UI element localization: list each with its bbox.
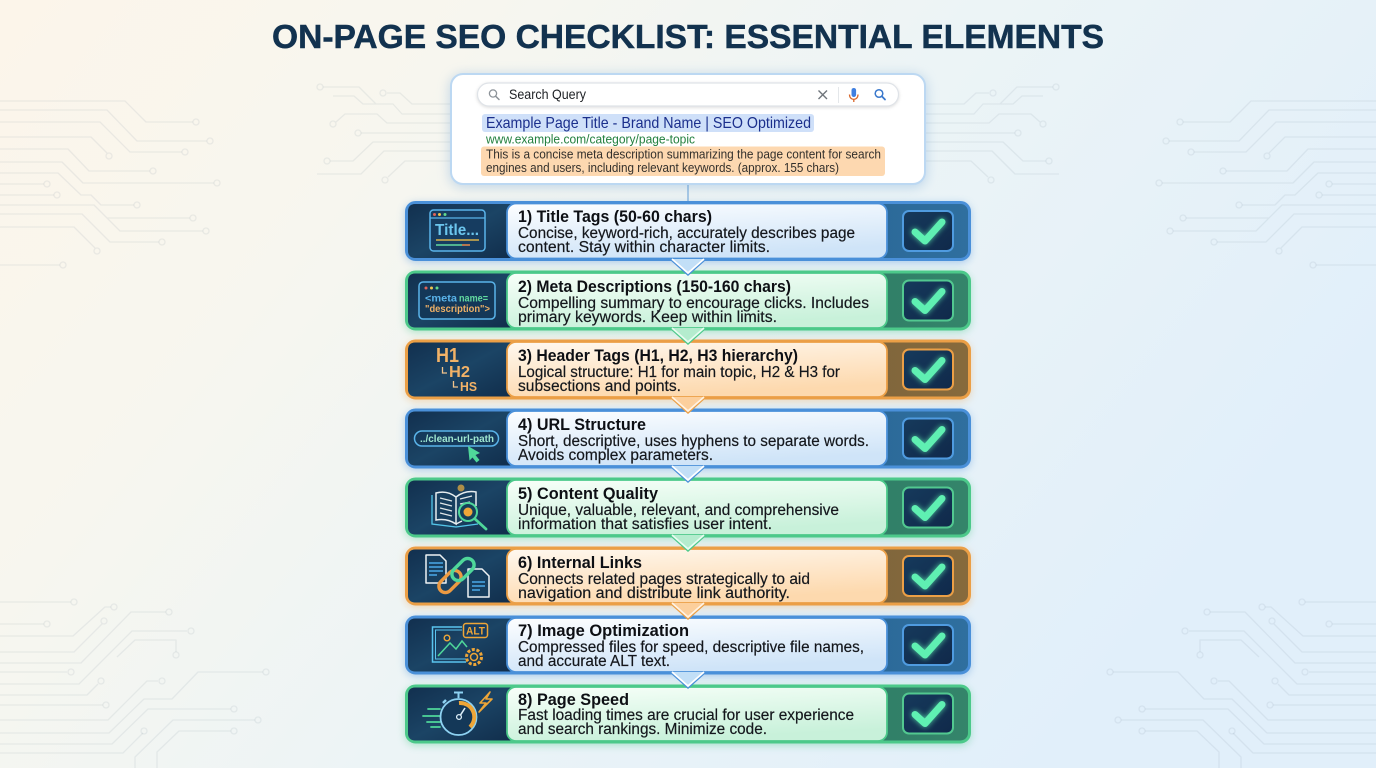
title: ON-PAGE SEO CHECKLIST: ESSENTIAL ELEMENTS: [272, 19, 1104, 56]
arrow: row 1 to row 2: [669, 259, 707, 276]
icon: checkmark: [903, 694, 953, 734]
icon: url pill with cursor: ../clean-url-path: [420, 433, 494, 445]
icon: checkmark: [903, 556, 953, 596]
text: meta descriptions: [518, 278, 869, 326]
text: internal links: navigation and distribute link authority.: [518, 585, 790, 602]
meta description highlight: This is a concise meta description summarizing the page content for search: [486, 148, 881, 162]
text: internal links: Connects related pages strategically to aid: [518, 571, 810, 588]
icon: header hierarchy: H1: [436, 345, 459, 367]
text: page speed: and search rankings. Minimize code.: [518, 721, 767, 738]
text: content quality: Unique, valuable, relevant, and comprehensive: [518, 502, 839, 519]
arrow: row 6 to row 7: [669, 603, 707, 620]
arrow: row 2 to row 3: [669, 328, 707, 345]
text: content quality: 5) Content Quality: [518, 485, 659, 503]
panel: row 7 image optimization: [406, 617, 970, 673]
text: internal links: 6) Internal Links: [518, 554, 642, 572]
search bar: Search Query: [509, 86, 586, 102]
icon: meta tag code window: name=: [459, 292, 488, 304]
icon: checkmark: [903, 488, 953, 528]
text: header tags: subsections and points.: [518, 378, 681, 395]
text: header tags: [518, 347, 840, 395]
text: meta descriptions: primary keywords. Keep within limits.: [518, 309, 777, 326]
icon: checkmark: [903, 418, 953, 458]
connector line: [687, 183, 689, 203]
icon: url pill with cursor: [414, 431, 498, 462]
icon: image, alt tag and gear: ALT: [466, 626, 485, 638]
text: url structure: Short, descriptive, uses hyphens to separate words.: [518, 433, 869, 450]
text: header tags: 3) Header Tags (H1, H2, H3 hierarchy): [518, 347, 798, 365]
text: url structure: 4) URL Structure: [518, 416, 646, 434]
text: header tags: Logical structure: H1 for main topic, H2 & H3 for: [518, 364, 840, 381]
search bar: [478, 83, 898, 106]
icon: checkmark: [903, 350, 953, 390]
panel: search result preview: [451, 74, 925, 184]
arrow: row 3 to row 4: [669, 397, 707, 414]
text: title tags: 1) Title Tags (50-60 chars): [518, 208, 712, 226]
icon: browser window title: [430, 210, 485, 251]
icon: meta tag code window: [419, 282, 495, 319]
icon: browser window title: Title...: [435, 222, 479, 239]
icon: checkmark: [903, 211, 953, 251]
text: image optimization: 7) Image Optimization: [518, 622, 689, 640]
panel: row 3 header tags: [406, 341, 970, 398]
text: page speed: 8) Page Speed: [518, 691, 629, 709]
text: page speed: Fast loading times are crucial for user experience: [518, 707, 854, 724]
panel: row 2 meta descriptions: [406, 272, 970, 329]
text: page speed: [518, 691, 854, 738]
text: content quality: [518, 485, 839, 533]
icon: meta tag code window: "description">: [425, 303, 490, 315]
text: internal links: [518, 554, 810, 602]
icon: stopwatch and lightning: [423, 692, 492, 735]
arrow: row 4 to row 5: [669, 466, 707, 483]
icon: meta tag code window: <meta: [425, 292, 457, 304]
text: title tags: [518, 208, 855, 256]
panel: row 1 title tags: [406, 202, 970, 260]
text: url structure: [518, 416, 869, 464]
meta description highlight: engines and users, including relevant keywords. (approx. 155 chars): [486, 161, 839, 175]
text: title tags: Concise, keyword-rich, accurately describes page: [518, 225, 855, 242]
icon: header hierarchy: [436, 345, 477, 394]
text: image optimization: Compressed files for speed, descriptive file names,: [518, 639, 864, 656]
text: meta descriptions: 2) Meta Descriptions (150-160 chars): [518, 278, 791, 296]
text: title tags: content. Stay within character limits.: [518, 239, 770, 256]
title tag highlight: Example Page Title - Brand Name | SEO Optimized: [486, 115, 811, 132]
text: meta descriptions: Compelling summary to encourage clicks. Includes: [518, 295, 869, 312]
text: image optimization: [518, 622, 864, 670]
text: url structure: Avoids complex parameters.: [518, 447, 713, 464]
panel: row 5 content quality: [406, 479, 970, 536]
icon: checkmark: [903, 625, 953, 665]
icon: header hierarchy: HS: [460, 380, 477, 394]
text: content quality: information that satisfies user intent.: [518, 516, 772, 533]
meta description highlight: [481, 146, 885, 176]
panel: row 4 url structure: [406, 410, 970, 467]
url: www.example.com/category/page-topic: [485, 132, 695, 146]
panel: row 6 internal links: [406, 548, 970, 604]
panel: row 8 page speed: [406, 686, 970, 742]
text: image optimization: and accurate ALT text.: [518, 653, 670, 670]
icon: checkmark: [903, 280, 953, 320]
icon: header hierarchy: H2: [449, 364, 470, 381]
icon: image, alt tag and gear: [432, 624, 488, 664]
arrow: row 5 to row 6: [669, 535, 707, 552]
icon: documents and chain link: [426, 555, 489, 597]
icon: book and magnifier: [432, 484, 486, 529]
arrow: row 7 to row 8: [669, 672, 707, 689]
